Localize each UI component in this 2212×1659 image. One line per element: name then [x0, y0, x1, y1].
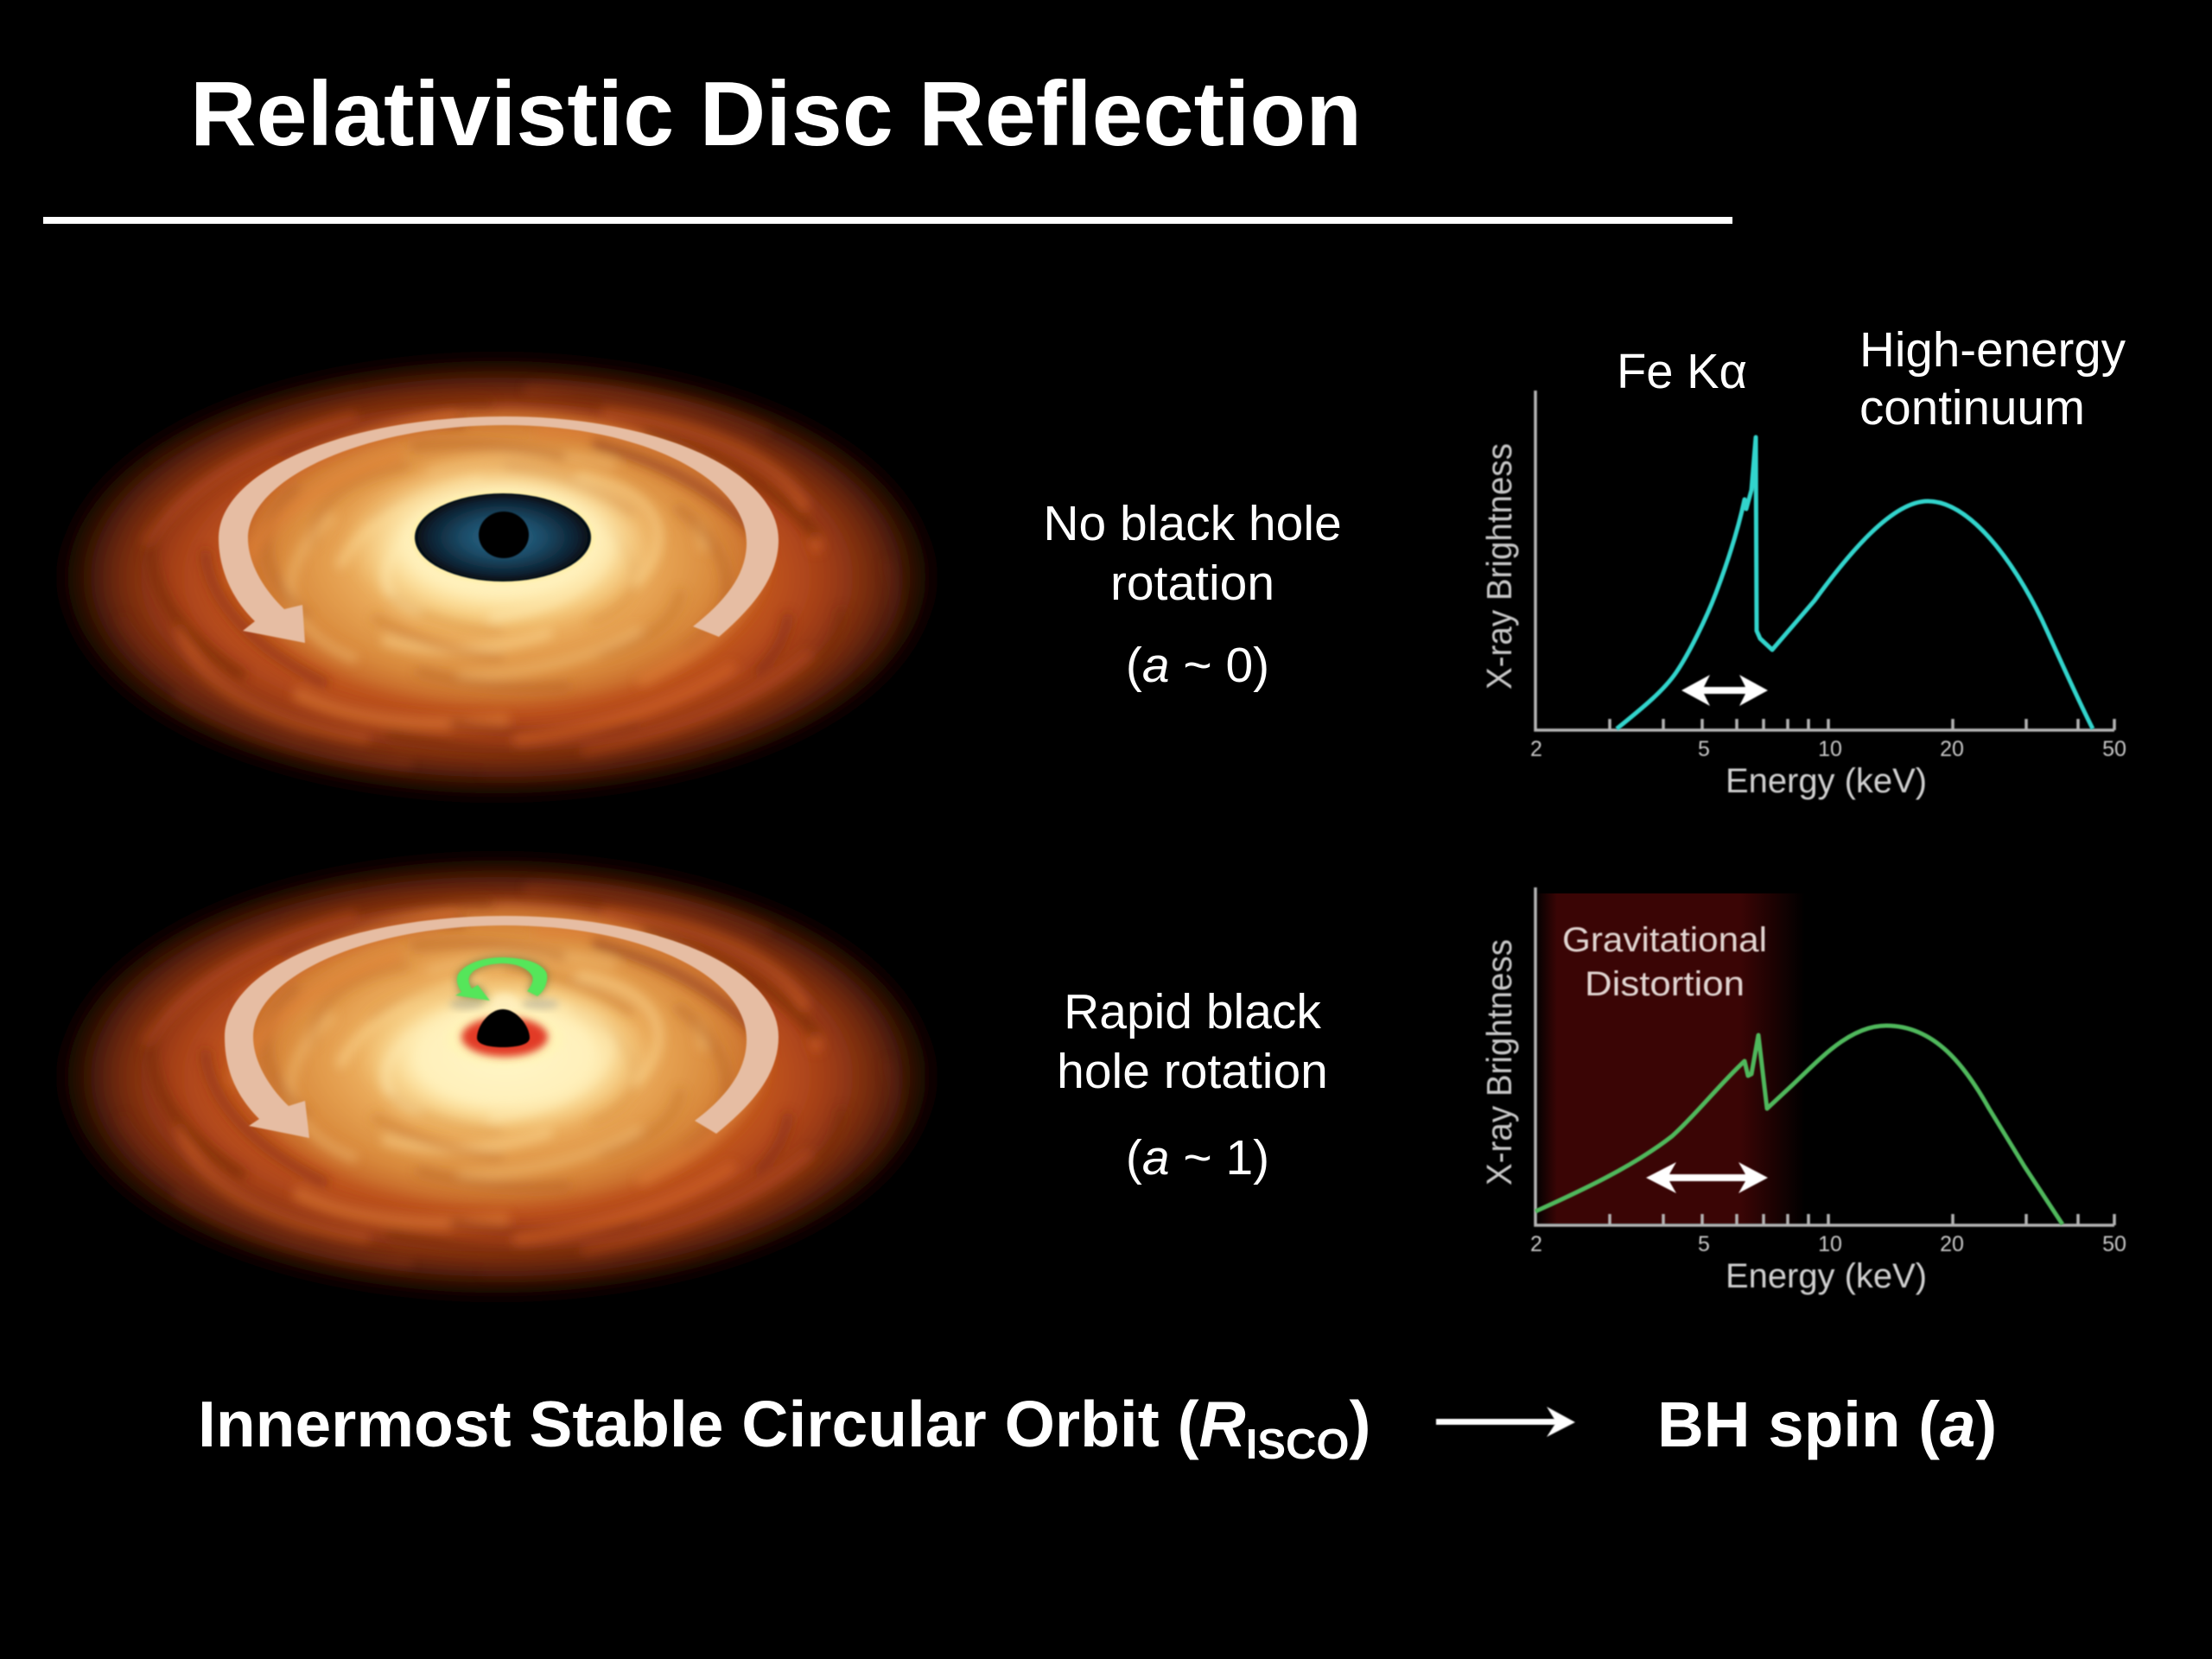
panel: accretion disc without rotation: [43, 345, 950, 810]
x tick labels: 10: [1818, 737, 1842, 761]
label: Fe K alpha: Fe Kα: [1617, 344, 1747, 399]
gravitational distortion band: [1535, 893, 1805, 1224]
x axis label: Energy (keV): [1726, 1257, 1927, 1295]
text: rapid rotation label: hole rotation: [1057, 1044, 1328, 1099]
disc rotation arrow: [219, 416, 779, 643]
x tick labels: 20: [1940, 737, 1964, 761]
text: rapid rotation label: (a ~ 1): [1126, 1130, 1269, 1185]
x tick labels: 50: [2102, 737, 2126, 761]
arrow to BH spin: [1436, 1407, 1575, 1437]
disc rotation arrow: [225, 916, 779, 1138]
text: rapid rotation label: [1057, 984, 1328, 1185]
text: no rotation label: [1043, 496, 1342, 693]
x tick labels: 5: [1698, 737, 1710, 761]
title rule: [43, 217, 1732, 224]
conclusion: innermost stable circular orbit: Innermost Stable Circular Orbit (R: [198, 1388, 1246, 1460]
black hole shadow with blue interior: [411, 491, 594, 584]
x tick labels: 10: [1818, 1232, 1842, 1256]
x tick labels: 2: [1530, 737, 1542, 761]
icon: green spin arrow: [455, 957, 547, 1001]
black hole with red ring: [446, 994, 563, 1066]
y axis label: X-ray Brightness: [1479, 939, 1519, 1185]
x tick labels: [1530, 1232, 2126, 1256]
double arrow: [1646, 1162, 1768, 1193]
y axis label: X-ray Brightness: [1479, 443, 1519, 690]
disc body: [43, 844, 950, 1309]
chart: spectrum without rotation: [1479, 322, 2126, 800]
label: gravitational distortion: Gravitational: [1562, 921, 1767, 959]
text: no rotation label: rotation: [1110, 556, 1274, 611]
conclusion: BH spin: BH spin (a): [1657, 1389, 1997, 1460]
chart: spectrum with rapid rotation: [1479, 887, 2126, 1295]
text: no rotation label: (a ~ 0): [1126, 638, 1269, 693]
x tick labels: 5: [1698, 1232, 1710, 1256]
double arrow: [1681, 675, 1768, 706]
x axis label: Energy (keV): [1726, 762, 1927, 800]
x tick labels: 20: [1940, 1232, 1964, 1256]
label: high-energy continuum: [1859, 322, 2126, 435]
spectrum curve: [1617, 437, 2093, 729]
panel: accretion disc with rapid rotation: [43, 844, 950, 1309]
conclusion: innermost stable circular orbit: ISCO: [1246, 1421, 1350, 1468]
spectrum curve: [1535, 1026, 2063, 1224]
text: no rotation label: No black hole: [1043, 496, 1342, 551]
x tick labels: 2: [1530, 1232, 1542, 1256]
disc body: [43, 345, 950, 810]
conclusion: innermost stable circular orbit: ): [1350, 1388, 1370, 1460]
text: rapid rotation label: Rapid black: [1064, 984, 1321, 1039]
label: high-energy continuum: High-energy: [1859, 322, 2126, 378]
x tick labels: [1530, 737, 2126, 761]
title: Relativistic Disc Reflection: [190, 63, 1362, 165]
axes and ticks: [1535, 391, 2114, 730]
x tick labels: 50: [2102, 1232, 2126, 1256]
label: gravitational distortion: Distortion: [1585, 965, 1745, 1003]
label: high-energy continuum: continuum: [1859, 380, 2085, 435]
axes and ticks: [1535, 887, 2114, 1225]
label: gravitational distortion: [1562, 921, 1767, 1003]
